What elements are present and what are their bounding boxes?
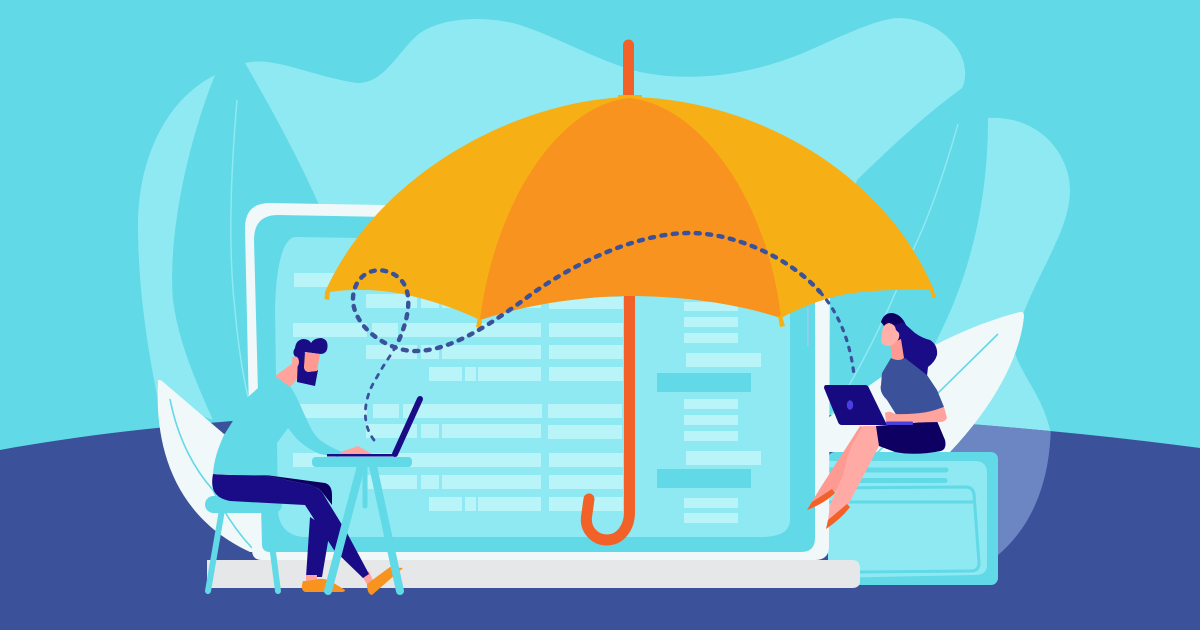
man working on laptop — [212, 338, 403, 595]
man right foot — [362, 571, 374, 586]
thin start of path — [365, 340, 399, 440]
man face — [304, 352, 320, 372]
dark blue ground — [0, 408, 1200, 630]
man torso and arm — [213, 376, 342, 475]
monitor bezel — [245, 203, 830, 560]
wallet body — [828, 452, 998, 585]
right white foreground leaf — [825, 312, 1024, 455]
laptop base — [207, 560, 860, 588]
loop and wave — [353, 233, 820, 351]
desk center post — [362, 466, 368, 506]
background blob: large central leaf — [245, 18, 965, 400]
chair — [205, 496, 282, 591]
woman arm — [885, 407, 947, 423]
white leaf shape — [825, 312, 1024, 452]
chair legs — [208, 510, 278, 591]
man back leg — [306, 517, 330, 577]
wallet text lines — [830, 470, 946, 480]
wallet inner panel — [828, 461, 987, 578]
umbrella center panel — [480, 98, 781, 320]
white leaf vein — [170, 399, 252, 548]
woman hair — [881, 313, 937, 376]
woman with laptop — [807, 313, 947, 529]
wallet card outline — [828, 487, 979, 572]
man right shoe — [367, 567, 403, 595]
laptop monitor — [245, 203, 830, 560]
translucent leaf overlap on ground — [950, 424, 1051, 555]
man left foot — [306, 575, 317, 582]
man back thigh shade — [258, 474, 332, 505]
desk legs — [328, 466, 400, 591]
thin end of path — [820, 292, 854, 375]
umbrella spike — [623, 45, 634, 100]
monitor screen — [254, 215, 815, 552]
man's laptop — [327, 399, 420, 456]
woman back leg — [808, 426, 876, 508]
cyan header bars — [657, 373, 751, 488]
laptop lid — [395, 399, 420, 454]
man front leg — [212, 474, 369, 578]
right background leaf — [830, 118, 1070, 555]
umbrella rib tips — [476, 316, 785, 328]
laptop keyboard — [327, 454, 397, 456]
laptop lid — [824, 385, 887, 425]
woman shirt — [881, 358, 944, 416]
right leaf vein — [830, 124, 958, 417]
woman skirt — [876, 421, 946, 454]
umbrella handle — [586, 280, 630, 540]
woman hair top — [881, 313, 904, 326]
umbrella canopy — [324, 97, 936, 320]
desk — [312, 457, 412, 591]
man ear — [292, 356, 299, 368]
woman front leg — [827, 426, 879, 528]
man left shoe — [302, 579, 345, 592]
desk top — [312, 457, 412, 467]
left white foreground leaf — [158, 380, 275, 552]
umbrella collar — [618, 95, 642, 101]
screen light panel — [275, 237, 790, 537]
woman shoes — [807, 489, 850, 529]
wallet / book the woman sits on — [828, 452, 998, 585]
chair seat — [205, 496, 282, 513]
right leaf shape — [900, 118, 1070, 555]
left leaf light half — [138, 75, 215, 420]
man hand — [341, 446, 372, 454]
man hair — [293, 338, 328, 358]
woman neck — [890, 339, 904, 360]
left background leaf — [138, 75, 248, 420]
white leaf vein — [875, 334, 998, 455]
white leaf shape — [158, 380, 275, 552]
laptop keyboard edge — [886, 422, 913, 425]
woman face — [881, 323, 899, 346]
woman's laptop — [824, 385, 913, 425]
spreadsheet rows — [293, 273, 761, 523]
small scrollbar mark — [807, 308, 809, 346]
laptop logo — [847, 400, 853, 410]
umbrella — [324, 45, 936, 540]
man neck — [275, 357, 299, 387]
left leaf vein — [231, 100, 248, 397]
dashed flight path — [353, 233, 854, 440]
man beard — [297, 352, 318, 386]
